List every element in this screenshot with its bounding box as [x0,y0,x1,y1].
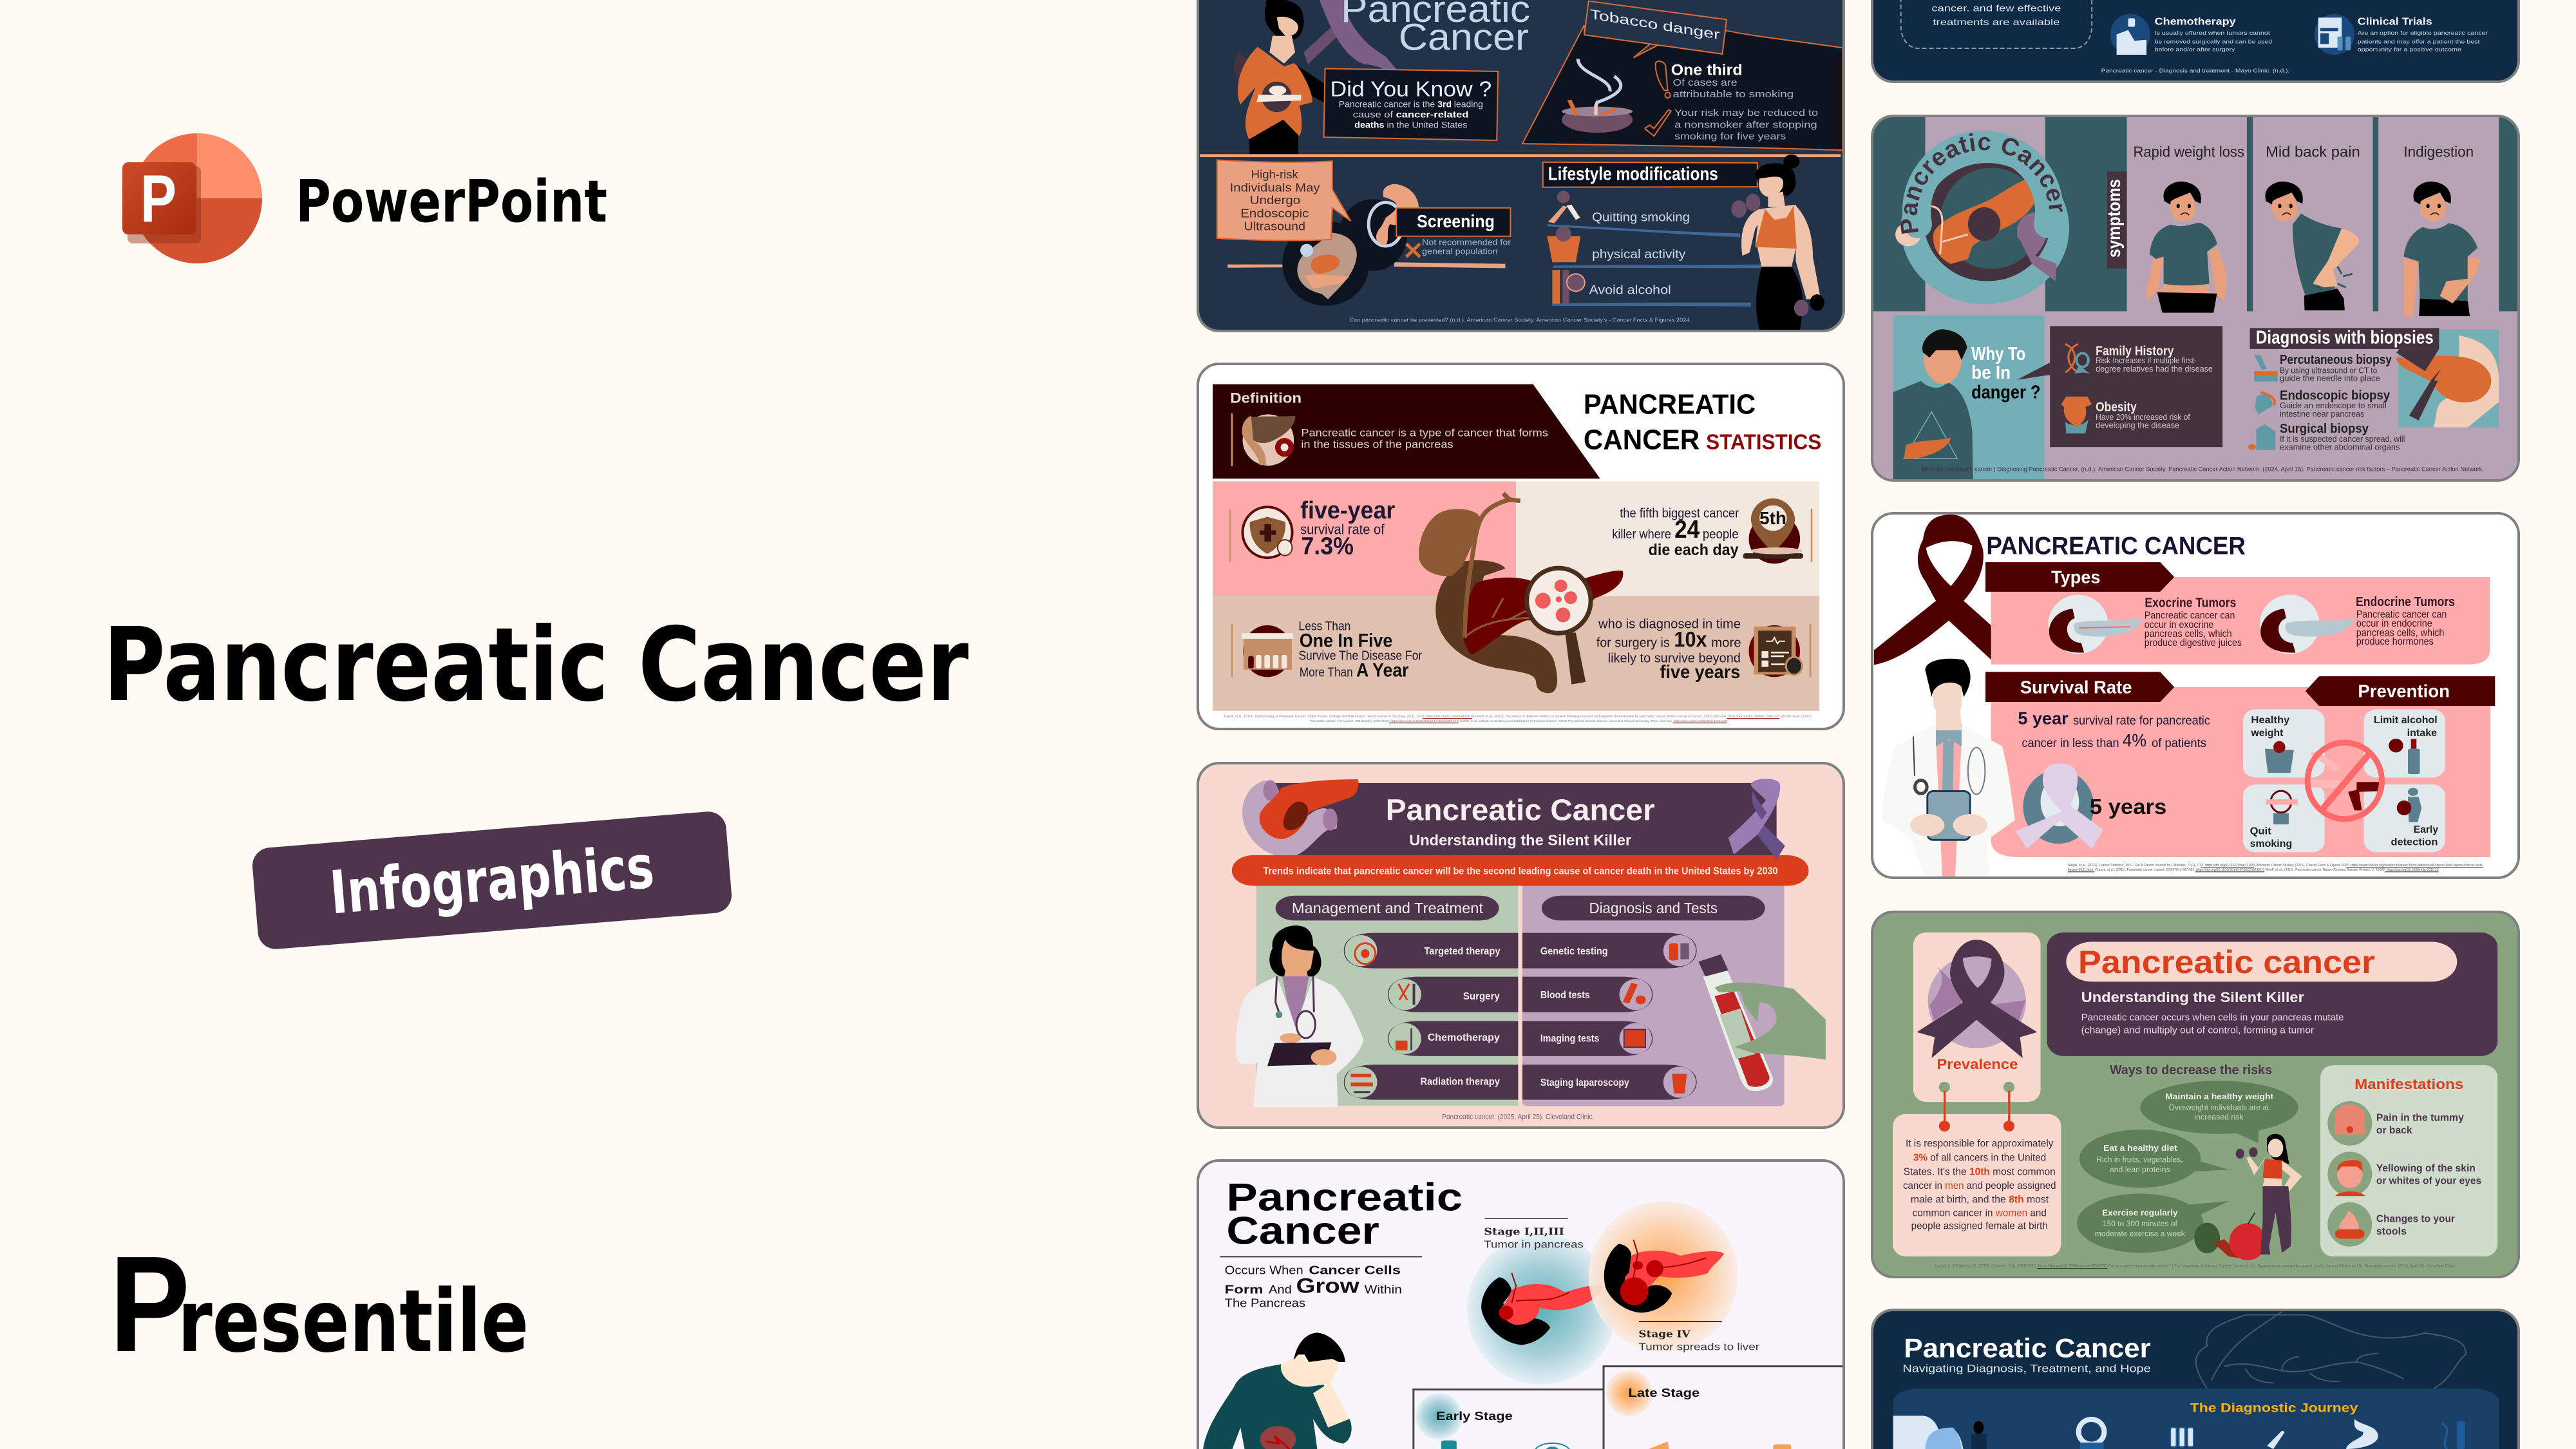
panel: manifestations: Yellowing of the skin [2376,1162,2476,1174]
panel: lifestyle modifications [1543,162,1761,307]
stat: five-year survival [1243,497,1395,560]
stat: 10x more likely: more [1711,636,1741,650]
title: CANCER [1584,424,1700,455]
logo: Presentile [109,1227,529,1380]
panel: manifestations: or whites of your eyes [2376,1175,2481,1186]
panel: types: pancreas cells, which [2145,628,2232,639]
description [1225,1264,1402,1310]
definition banner [1213,384,1600,478]
main title: Pancreatic Cancer [103,606,969,724]
header panel: Pancreatic cancer [2078,944,2375,980]
symptom: mid back pain [2265,144,2360,310]
panel: the diagnostic journey: The Diagnostic Journey [2190,1401,2358,1415]
stat: fifth biggest cancer killer: 5th [1759,509,1786,528]
card: pancreatic cancer statistics [1198,364,1844,729]
ribbon [1728,779,1785,860]
prevention tiles: weight [2251,727,2283,738]
label: stage 4: Stage IV [1638,1328,1691,1340]
definition banner: in the tissues of the pancreas [1301,439,1454,451]
bubble: healthy diet: Rich in fruits, vegetables, [2096,1155,2183,1164]
description: And [1269,1283,1292,1296]
source note: Pancreatic cancer. (2025, April 25). Cleveland Clinic. [1442,1113,1594,1121]
panel: diagnosis with biopsies [2248,328,2499,451]
callout: high risk: High-risk [1251,168,1298,182]
title: Pancreatic Cancer [1904,1333,2151,1363]
man with stomach pain [1203,1332,1352,1449]
callout: high risk: Ultrasound [1244,220,1305,233]
panel: tobacco danger: Of cases are [1672,77,1738,88]
item: clinical trials [2315,14,2488,55]
panel: management and treatment [1276,896,1518,1100]
panel: diagnosis with biopsies: By using ultrasound or CT to [2280,365,2377,375]
panel: manifestations: Manifestations [2354,1076,2463,1092]
card: types and survival, white [1872,513,2519,878]
panel: early stage: Early Stage [1436,1409,1513,1423]
panel: lifestyle modifications: Quitting smoking [1592,210,1690,224]
panel: tobacco danger: Your risk may be reduced to [1674,108,1818,118]
panel: screening: general population [1422,247,1498,256]
panel: types: pancreas cells, which [2356,627,2444,638]
curved title: Pancreatic Cancer: Pancreatic Cancer [1900,133,2063,234]
woman exercising with food [2194,1134,2302,1260]
panel: types: Exocrine Tumors [2145,596,2236,610]
card: treatment, dark blue [1872,0,2519,82]
item: chemotherapy: be removed surgically and can be used [2155,39,2272,44]
panel: diagnosis and tests [1522,896,1765,1100]
panel: survival rate and prevention: Prevention [2358,681,2450,701]
panel: survival rate and prevention: of patients [2152,735,2206,750]
panel: manifestations: Pain in the tummy [2376,1112,2464,1123]
red trend banner: Trends indicate that pancreatic cancer will be the second leading cause of cancer death in the United States by 2030 [1263,865,1778,876]
panel: survival rate and prevention: cancer in less than [2022,735,2119,750]
prevention tiles: smoking [2250,838,2292,849]
panel: survival rate and prevention: survival rate for pancreatic [2073,713,2210,727]
symptom: rapid weight loss: Rapid weight loss [2134,144,2244,160]
prevention tiles: intake [2407,727,2437,738]
panel: late stage [1604,1367,1845,1449]
panel: prevalence text: cancer in men and people assigned [1903,1180,2056,1191]
panel: why to be in danger: danger ? [1971,381,2041,402]
stat: five-year survival: 7.3% [1301,533,1354,560]
panel: prevalence text: common cancer in women and [1913,1208,2047,1218]
panel: management and treatment: Surgery [1463,990,1500,1001]
dashed callout: treatments are available [1933,17,2060,27]
icon: PowerPoint logo [122,133,262,263]
references: Pancreatic cancer. The Lancet, 395(10242), 2008-2020. https://doi.org/10.1016/S0140-6736(20)30974-0 Stoffel, et al., (2019). Evaluating Susceptibility to Pancreatic Cancer: ASCO Provisional Clinical Opinion. Journal of Clinical Oncology, 37(2), 153-164. https://doi.org/10.1200/JCO.18.01489 [1310,719,1727,723]
panel: management and treatment: Targeted therapy [1424,945,1501,956]
callout: high risk: Individuals May [1230,181,1320,194]
title: Cancer [1226,1209,1379,1253]
panel: risk factors: Obesity [2096,400,2137,414]
prevention tiles: Healthy [2251,714,2289,726]
title: PANCREATIC [1584,389,1756,420]
bubble: healthy weight: Overweight individuals are at [2169,1103,2269,1112]
logo: Presentile: resentile [178,1271,529,1372]
card: silent killer, green [1872,912,2519,1277]
stat: 10x more likely [1596,617,1802,683]
bubble: exercise: 150 to 300 minutes of [2103,1219,2177,1228]
item: clinical trials: Are an option for eligible pancreatic cancer [2358,30,2488,36]
callout: high risk: Endoscopic [1240,207,1309,220]
dashed callout [1901,0,2092,48]
tag: Infographics: Infographics [327,833,656,927]
item: chemotherapy: Is usually offered when tumors cannot [2155,30,2270,36]
stat: fifth biggest cancer killer [1612,498,1803,564]
stat: 10x more likely: likely to survive beyond [1608,651,1741,665]
stat: one in five: One In Five [1300,630,1392,651]
panel: survival rate and prevention [1985,672,2495,857]
item: clinical trials: patients and may offer a patient the best [2358,39,2480,44]
panel: survival rate and prevention: 5 years [2090,795,2166,819]
header banner: Pancreatic Cancer [1386,793,1655,826]
item: clinical trials: Clinical Trials [2358,16,2432,27]
left column: brand and title [103,133,969,1380]
panel: management and treatment: Radiation therapy [1420,1075,1500,1087]
prevention tiles: detection [2391,837,2438,848]
panel: types: Types [2051,567,2100,587]
illustration: pancreas [1242,779,1358,858]
source note: Can pancreatic cancer be prevented? (n.d.). American Cancer Society. American Cancer Society's - Cancer Facts & Figures 2024. [1349,317,1691,323]
label: stage 1 to 3: Stage I,II,III [1484,1226,1564,1237]
card: diagnostic journey, dark blue [1872,1310,2519,1449]
icon: no smoking sign [2307,743,2382,819]
panel: diagnosis with biopsies: guide the needle into place [2280,374,2380,383]
callout: did you know: deaths in the United States [1354,120,1467,130]
panel: manifestations: or back [2376,1124,2412,1136]
panel: screening: Not recommended for [1422,238,1511,247]
panel: prevalence badge [1913,933,2041,1102]
panel: risk factors: degree relatives had the disease [2096,364,2213,374]
label: stage 4 [1638,1321,1759,1352]
panel: prevalence text: It is responsible for approximately [1906,1138,2054,1149]
illustration: early pancreas [1467,1235,1616,1385]
title [1226,1175,1463,1253]
stat: 10x more likely: 10x [1674,628,1707,651]
stat: one in five: Survive The Disease For [1298,649,1422,663]
panel: types: Pancreatic cancer can [2356,609,2447,620]
bubble: exercise: Exercise regularly [2102,1208,2178,1217]
panel: screening [1227,184,1511,306]
panel: types: occur in endocrine [2356,618,2432,629]
panel: diagnosis with biopsies: Surgical biopsy [2280,421,2369,435]
references [1224,715,1812,723]
stat: 10x more likely: five years [1660,661,1740,683]
prevention tiles: Quit [2250,825,2271,837]
panel: tobacco danger: smoking for five years [1674,131,1786,142]
header banner [1274,783,1777,857]
card: prevention, navy [1198,0,1844,331]
panel: manifestations: Changes to your [2376,1213,2455,1224]
panel: prevalence text: male at birth, and the 8th most [1911,1193,2049,1205]
description: The Pancreas [1225,1296,1305,1310]
bubble: healthy weight: increased risk [2194,1113,2244,1121]
panel: why to be in danger: Why To [1971,343,2025,364]
description: Occurs When [1225,1264,1303,1277]
prevention tiles: Early [2414,824,2438,835]
callout: did you know [1324,68,1498,140]
bubble: healthy diet [2079,1130,2230,1188]
label: stage 1 to 3 [1484,1218,1584,1250]
definition banner: Definition [1230,390,1302,406]
header panel: (change) and multiply out of control, forming a tumor [2081,1025,2314,1036]
bubble: healthy weight: Maintain a healthy weight [2165,1092,2273,1101]
stat: five-year survival: survival rate of [1300,522,1385,537]
panel: late stage: Late Stage [1628,1386,1700,1399]
header panel: Understanding the Silent Killer [2081,989,2304,1005]
panel: diagnosis and tests: Diagnosis and Tests [1589,900,1718,916]
panel: early stage [1414,1390,1604,1449]
symptom: mid back pain: Mid back pain [2266,144,2360,160]
panel: screening: Screening [1417,212,1495,232]
title: Pancreatic [1226,1175,1463,1219]
references: Pandit, et al., (2019). Epidemiology of Pancreatic Cancer: Global Trends, Etiology and Risk Factors. World Journal of Oncology, 10(1), 10-27. https://doi.org/10.14740/wjon1166 Kleeff, et al., (2016). The impact of diabetes mellitus on survival following resection and adjuvant chemotherapy for pancreatic cancer. British Journal of Cancer, 115(7), 887-894. https://doi.org/10.1038/bjc.2016.277 Mizrahi, et al., (2020). [1224,715,1812,718]
panel: types: produce hormones [2356,636,2434,647]
label: stage 1 to 3: Tumor in pancreas [1484,1239,1584,1250]
panel: why to be in danger: be In [1971,362,2011,383]
doctor illustration [1236,925,1363,1107]
definition banner: Pancreatic cancer is a type of cancer that forms [1301,427,1548,439]
callout: did you know: cause of cancer-related [1353,110,1468,120]
panel: risk factors: developing the disease [2096,421,2179,430]
panel: the diagnostic journey [1893,1388,2499,1449]
title: PANCREATIC CANCER [1986,531,2246,560]
panel: prevalence badge: Prevalence [1937,1056,2018,1072]
panel: risk factors: Have 20% increased risk of [2096,412,2190,422]
panel: diagnosis and tests: Imaging tests [1540,1032,1599,1044]
panel: tobacco danger [1522,1,1842,150]
panel: tobacco danger: a nonsmoker after stopping [1674,119,1817,130]
pancreas outline watermark [2196,1312,2466,1388]
panel: diagnosis with biopsies: intestine near pancreas [2280,409,2364,419]
header panel [2047,933,2497,1056]
panel: types: occur in exocrine [2145,619,2213,630]
brand name: PowerPoint: PowerPoint [296,168,607,236]
panel: tobacco danger: Tobacco danger [1590,6,1719,42]
illustration: pancreas with magnifier [1419,493,1623,693]
symptoms label: symptoms [2104,179,2124,258]
symptoms label box [2107,171,2127,269]
card: symptoms, mauve [1871,115,2520,482]
panel: prevalence text: 3% of all cancers in the United [1913,1151,2046,1163]
fitness woman [1731,155,1824,330]
description: Within [1365,1283,1402,1296]
header banner: Understanding the Silent Killer [1409,832,1631,849]
bubble: healthy diet: Eat a healthy diet [2103,1143,2177,1153]
illustration: late pancreas [1589,1201,1738,1351]
callout: did you know: Pancreatic cancer is the 3rd leading [1339,100,1483,109]
title: Cancer [1399,17,1529,59]
title: STATISTICS [1706,430,1821,454]
bubble: exercise: moderate exercise a week [2095,1229,2185,1238]
panel: diagnosis and tests: Blood tests [1540,989,1590,1001]
callout: high risk [1217,160,1350,241]
heading: ways to decrease the risks: Ways to decrease the risks [2110,1063,2272,1077]
symptom: indigestion: Indigestion [2403,144,2474,160]
stat: one in five: Less Than [1298,619,1350,633]
panel: tobacco danger: attributable to smoking [1672,89,1794,99]
panel: types: Pancreatic cancer can [2145,609,2235,621]
stat: 10x more likely: for surgery is [1596,636,1670,650]
item: clinical trials: opportunity for a positive outcome [2358,46,2461,52]
source note: Pancreatic cancer - Diagnosis and treatment - Mayo Clinic. (n.d.). [2101,68,2289,73]
emblem: pancreas in ring [1895,153,2069,304]
doctor with tablet [1882,659,2015,878]
description: Form [1225,1283,1263,1296]
stat: fifth biggest cancer killer: die each day [1649,540,1739,559]
stat: one in five [1242,619,1422,681]
prevention tiles [2243,709,2445,852]
callout: high risk: Undergo [1250,194,1300,207]
stat: 10x more likely: who is diagnosed in time [1598,617,1741,631]
item: chemotherapy: Chemotherapy [2155,16,2236,27]
panel: why to be in danger [1893,315,2045,480]
stat: fifth biggest cancer killer: people [1703,527,1739,542]
stat: one in five: A Year [1356,659,1409,681]
panel: diagnosis with biopsies: Guide an endoscope to small [2280,401,2387,410]
panel: survival rate and prevention: Survival Rate [2020,678,2132,697]
tag: Infographics [251,810,733,951]
card: stages, lavender [1198,1160,1845,1449]
icon: PowerPoint logo: P [140,162,176,236]
stat: one in five: More Than [1300,665,1353,679]
panel: manifestations [2320,1065,2497,1256]
bubble: healthy weight [2140,1081,2298,1143]
panel: management and treatment: Chemotherapy [1428,1031,1500,1043]
description: Grow [1296,1274,1359,1297]
panel: prevalence text [1893,1091,2061,1256]
panel: risk factors: Risk Increases if multiple first- [2096,355,2197,365]
ribbon [1303,0,1396,70]
panel: risk factors [2017,326,2222,447]
card: silent killer, pink [1198,763,1844,1128]
panel: lifestyle modifications: Lifestyle modifications [1548,163,1718,184]
title [1584,394,1821,450]
panel: prevalence text: people assigned female at birth [1911,1220,2048,1231]
panel: lifestyle modifications: Avoid alcohol [1589,283,1671,297]
red trend banner [1232,855,1808,886]
panel: risk factors: Family History [2096,344,2174,358]
woman holding belly [1233,0,1326,154]
panel: diagnosis with biopsies: Endoscopic biopsy [2280,388,2390,402]
bubble: healthy diet: and lean proteins [2110,1165,2170,1174]
subtitle: Navigating Diagnosis, Treatment, and Hope [1902,1362,2151,1374]
header panel: Pancreatic cancer occurs when cells in your pancreas mutate [2081,1012,2344,1023]
title [1344,0,1529,50]
panel: types [1985,562,2490,665]
item: chemotherapy [2110,14,2272,55]
panel: diagnosis with biopsies: If it is suspected cancer spread, will [2280,434,2405,444]
panel: survival rate and prevention: 5 year [2018,709,2069,728]
item: chemotherapy: before and/or after surgery [2155,46,2235,52]
stat: fifth biggest cancer killer: 24 [1674,515,1700,544]
stat: fifth biggest cancer killer: the fifth biggest cancer [1620,506,1739,521]
callout: did you know: Did You Know ? [1331,77,1492,100]
logo: Presentile: P [109,1227,190,1380]
stat: five-year survival: five-year [1300,497,1395,524]
panel: types: produce digestive juices [2145,637,2242,649]
panel: manifestations: stools [2376,1226,2407,1236]
symptom: rapid weight loss [2134,144,2244,313]
panel: management and treatment: Management and Treatment [1292,900,1483,916]
references [2068,863,2484,872]
panel: diagnosis and tests: Genetic testing [1540,945,1608,956]
panel: diagnosis with biopsies: examine other abdominal organs [2280,442,2400,451]
panel: types: Endocrine Tumors [2356,594,2455,609]
panel: survival rate and prevention: 4% [2123,731,2146,750]
panel: diagnosis and tests: Staging laparoscopy [1540,1076,1629,1088]
bubble: exercise [2077,1193,2230,1253]
panel: prevalence text: States. It's the 10th most common [1904,1166,2056,1177]
description: Cancer Cells [1309,1264,1401,1277]
prevention tiles: Limit alcohol [2374,714,2438,726]
dashed callout: cancer. and few effective [1931,3,2061,14]
ribbon [1874,515,1991,665]
stat: fifth biggest cancer killer: killer where [1612,527,1671,542]
blood test tube in hand [1698,954,1826,1091]
teal stripes [1872,113,2520,311]
symptom: indigestion [2403,144,2481,317]
panel: lifestyle modifications: physical activity [1592,247,1686,261]
panel: tobacco danger: One third [1671,61,1743,79]
label: stage 4: Tumor spreads to liver [1638,1341,1759,1352]
panel: diagnosis with biopsies: Percutaneous biopsy [2280,352,2392,366]
